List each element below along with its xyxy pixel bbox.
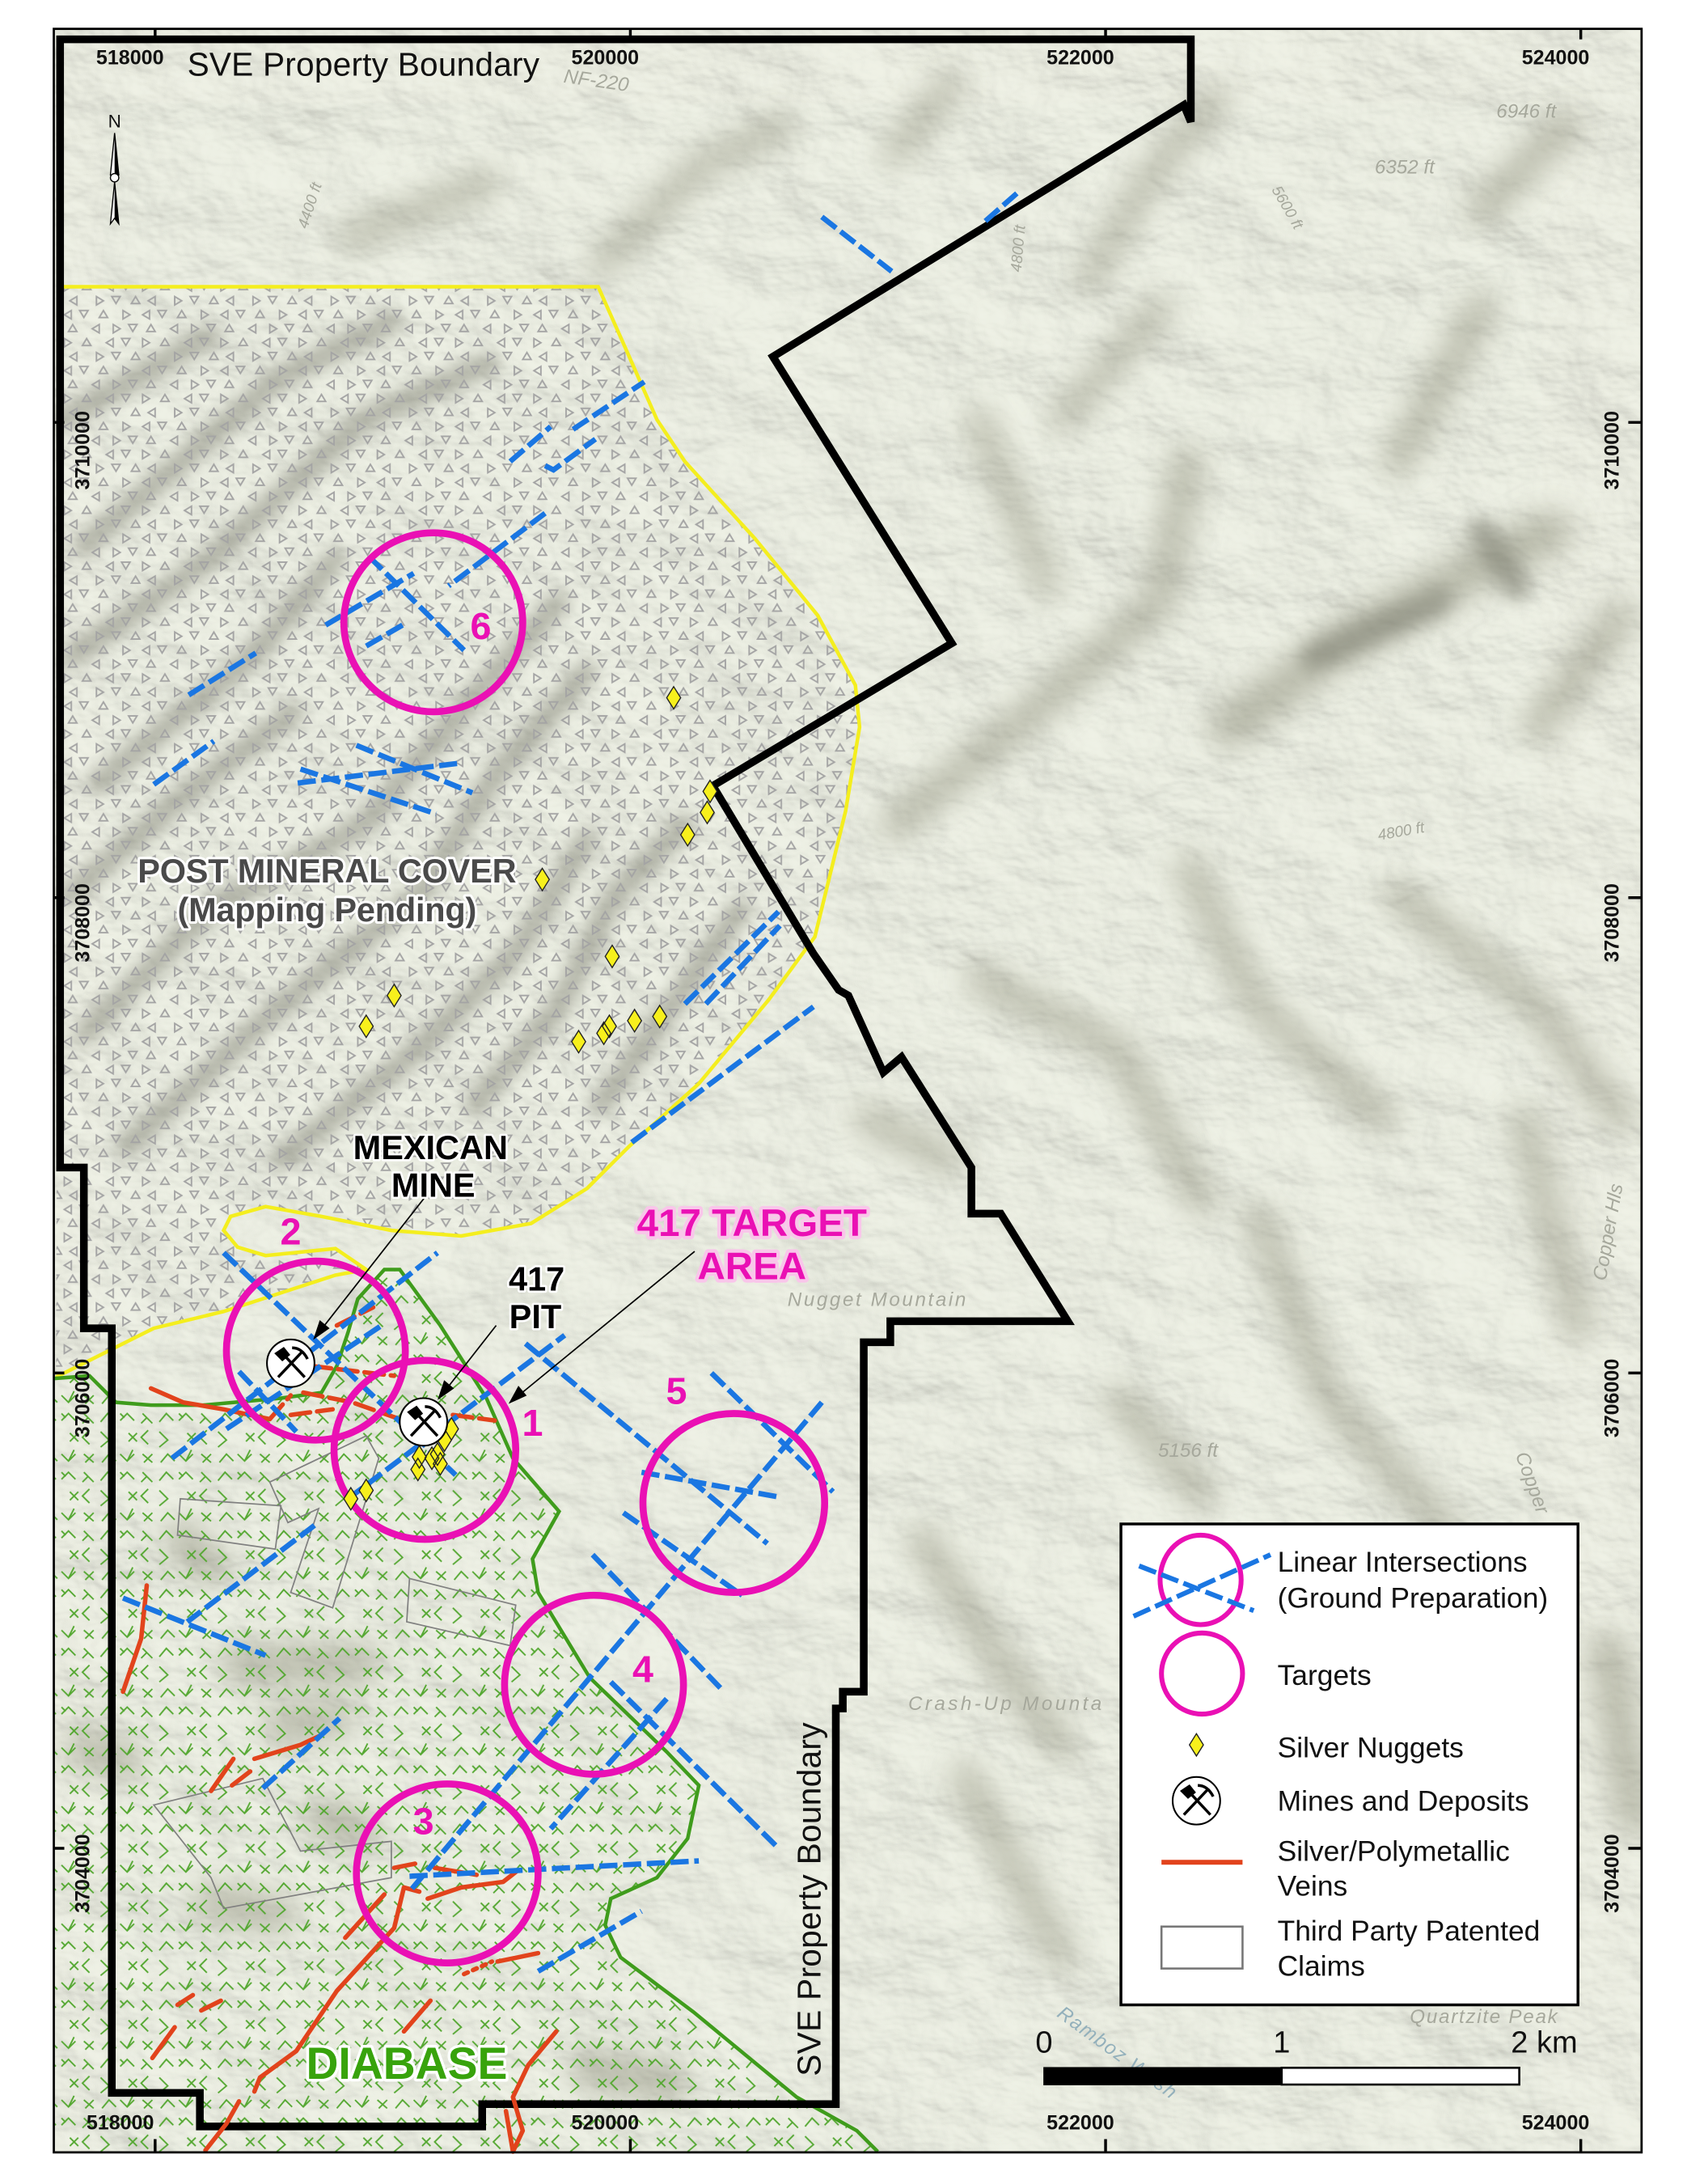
- target numbers: 4: [632, 1648, 653, 1690]
- label: Mexican Mine: MINE: [391, 1166, 476, 1204]
- label: 417 Pit: [509, 1259, 564, 1335]
- silver polymetallic veins: [123, 1307, 556, 2152]
- legend: linear intersections: (Ground Preparation): [1278, 1582, 1548, 1615]
- map labels: faint basemap names: Crash-Up Mounta: [908, 1693, 1105, 1715]
- grid coordinates: top: 522000: [1046, 47, 1114, 70]
- grid coordinates: top: [96, 47, 1589, 70]
- legend: targets: Targets: [1278, 1659, 1372, 1691]
- property boundary label rotated: SVE Property Boundary: [790, 1722, 827, 2076]
- legend: veins: [1161, 1835, 1510, 1903]
- legend: silver nuggets: Silver Nuggets: [1278, 1732, 1464, 1764]
- legend panel: [1121, 1524, 1578, 2005]
- legend: claims: Claims: [1278, 1949, 1365, 1982]
- grid coordinates: bottom: 520000: [572, 2111, 639, 2134]
- label: post mineral cover: (Mapping Pending): [177, 891, 476, 929]
- blue linear intersections: [123, 190, 1021, 1971]
- label: Mexican Mine: MEXICAN: [353, 1128, 508, 1166]
- diabase: green tick pattern: [53, 1259, 892, 2153]
- map labels: faint basemap names: Ramboz Wash: [1053, 2002, 1182, 2104]
- legend: veins: Veins: [1278, 1870, 1347, 1903]
- target numbers: 6: [471, 605, 491, 647]
- mine icon: 417 Pit: [400, 1398, 447, 1445]
- grid coordinates: left: [72, 411, 95, 1913]
- grid coordinates: top: 518000: [96, 47, 164, 70]
- legend: claims: [1161, 1915, 1540, 1982]
- target circles: [226, 533, 825, 1963]
- map labels: faint basemap names: 6352 ft: [1375, 157, 1435, 179]
- target numbers: 3: [413, 1801, 434, 1843]
- map labels: faint basemap names: Copper Hls: [1589, 1182, 1628, 1282]
- grid coordinates: bottom: 524000: [1522, 2111, 1589, 2134]
- map labels: faint basemap names: NF-220: [562, 66, 631, 96]
- label: Mexican Mine: [353, 1128, 508, 1204]
- yellow cover outline: [56, 287, 860, 1378]
- target 1: [334, 1361, 516, 1539]
- legend: claims: Third Party Patented: [1278, 1915, 1540, 1947]
- map labels: faint basemap names: 4400 ft: [295, 180, 326, 231]
- map labels: faint basemap names: 5156 ft: [1158, 1440, 1219, 1462]
- target 2: [226, 1261, 405, 1440]
- north arrow: [108, 112, 121, 224]
- third party patented claims: [154, 1436, 516, 1908]
- legend: mines and deposits: [1173, 1777, 1529, 1825]
- map labels: faint basemap names: Quartzite Peak: [1410, 2006, 1559, 2028]
- green diabase contact: [53, 1269, 877, 2152]
- scale bar: 0: [1035, 2025, 1053, 2059]
- property boundary label top: SVE Property Boundary: [188, 46, 540, 83]
- grid coordinates: right: 3710000: [1600, 411, 1623, 489]
- legend: linear intersections: [1134, 1535, 1548, 1624]
- target 3: [357, 1784, 538, 1963]
- map labels: faint basemap names: 4800 ft: [1008, 224, 1030, 273]
- target numbers: 1: [522, 1402, 543, 1444]
- label: 417 target area: 417 TARGET: [637, 1202, 867, 1245]
- grid coordinates: bottom: 518000: [87, 2111, 154, 2134]
- grid coordinates: right: 3706000: [1600, 1359, 1623, 1437]
- label: post mineral cover: [137, 852, 517, 929]
- map labels: faint basemap names: 4800 ft: [1376, 819, 1427, 844]
- grid coordinates: top: 524000: [1522, 47, 1589, 70]
- label: 417 Pit: PIT: [509, 1297, 561, 1335]
- grid coordinates: left: 3710000: [72, 411, 95, 489]
- map labels: faint basemap names: 6946 ft: [1496, 100, 1558, 122]
- grid coordinates: left: 3706000: [72, 1359, 95, 1437]
- north arrow: N: [108, 112, 121, 132]
- map labels: faint basemap names: Nugget Mountain: [788, 1289, 968, 1310]
- map labels: faint basemap names: Copper: [1511, 1449, 1554, 1517]
- grid coordinates: top: 520000: [572, 47, 639, 70]
- target 6: [344, 533, 522, 712]
- grid coordinates: left: 3708000: [72, 883, 95, 963]
- silver nuggets: [344, 687, 717, 1510]
- target numbers: [280, 605, 687, 1843]
- label: 417 target area: [637, 1202, 867, 1289]
- target numbers: 5: [666, 1369, 687, 1412]
- map labels: faint basemap names: [295, 66, 1628, 2104]
- scale bar: [1035, 2025, 1578, 2085]
- property boundary: [60, 40, 1190, 2127]
- grid coordinates: bottom: 522000: [1046, 2111, 1114, 2134]
- legend: silver nuggets: [1190, 1732, 1464, 1764]
- post mineral cover: triangle pattern: [53, 280, 877, 1384]
- grid coordinates: bottom: [87, 2111, 1589, 2134]
- legend: veins: Silver/Polymetallic: [1278, 1835, 1510, 1868]
- label: 417 target area: AREA: [697, 1246, 806, 1289]
- map labels: faint basemap names: 5600 ft: [1268, 183, 1306, 233]
- target numbers: 2: [280, 1210, 301, 1252]
- legend: mines and deposits: Mines and Deposits: [1278, 1784, 1529, 1817]
- grid coordinates: left: 3704000: [72, 1834, 95, 1913]
- grid coordinates: right: 3708000: [1600, 883, 1623, 963]
- grid coordinates: right: [1600, 411, 1623, 1913]
- grid coordinates: right: 3704000: [1600, 1834, 1623, 1913]
- label: post mineral cover: POST MINERAL COVER: [137, 852, 517, 890]
- legend: linear intersections: Linear Intersections: [1278, 1546, 1528, 1578]
- scale bar: 2 km: [1511, 2025, 1578, 2059]
- label: diabase: DIABASE: [306, 2038, 507, 2089]
- scale bar: 1: [1273, 2025, 1290, 2059]
- mine icon: Mexican Mine: [267, 1340, 315, 1387]
- target 4: [505, 1595, 683, 1774]
- leader arrows: [315, 1196, 695, 1403]
- label: 417 Pit: 417: [509, 1259, 564, 1297]
- target 5: [643, 1413, 825, 1593]
- legend: targets: [1161, 1633, 1372, 1714]
